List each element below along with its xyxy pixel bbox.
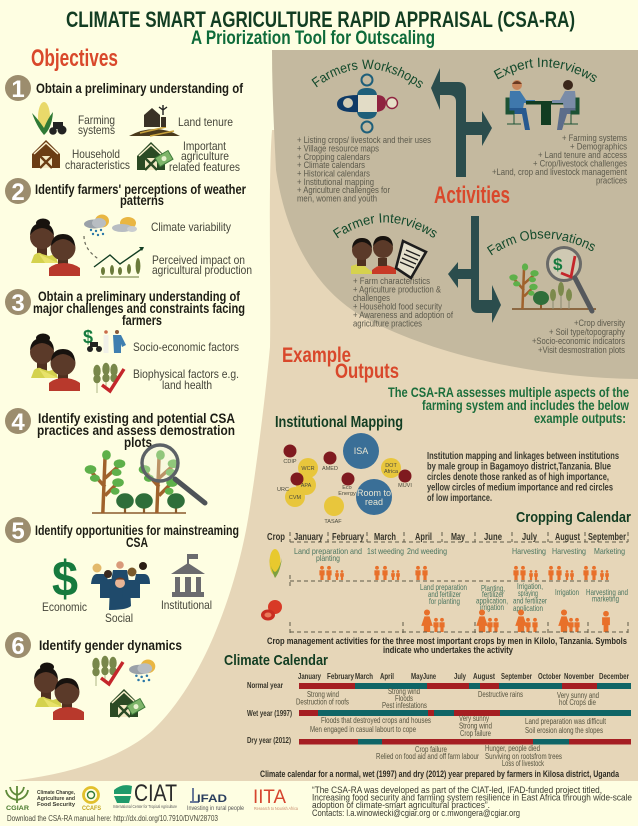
number badge 5 bbox=[5, 517, 31, 545]
label: household characteristics: Household bbox=[72, 147, 120, 161]
activity list bbox=[532, 318, 625, 356]
chart: institutional map bubbles: CDIP bbox=[283, 459, 297, 465]
logo: IFAD bbox=[187, 788, 244, 812]
number badge 6 bbox=[5, 632, 31, 660]
label: important agriculture related features: agriculture bbox=[181, 149, 229, 163]
icon: money, tractor and business people: $ bbox=[83, 327, 93, 347]
activity: expert interviews bbox=[492, 58, 627, 186]
text block: project statement and contacts bbox=[312, 785, 632, 819]
row: dry year: Surviving on rootsfrom trees bbox=[485, 752, 562, 761]
icon: corn and tractor bbox=[32, 102, 66, 135]
number badge 2: 2 bbox=[11, 179, 25, 206]
chart: institutional map bubbles: URC bbox=[277, 487, 289, 493]
label: important agriculture related features: Important bbox=[183, 139, 227, 153]
label: climate variability: Climate variability bbox=[151, 220, 231, 234]
row: maize activity labels: Land preparation and bbox=[294, 546, 362, 556]
label: socio-economic factors: Socio-economic factors bbox=[133, 340, 239, 354]
chart: institutional map bubbles: DOT bbox=[385, 463, 397, 469]
heading: institutional mapping: Institutional Mapping bbox=[275, 414, 403, 431]
logo: CIAT: International Center for Tropical Agriculture bbox=[113, 804, 177, 809]
logo: CIAT: CIAT bbox=[134, 780, 177, 807]
objective 3 heading: farmers bbox=[122, 313, 162, 328]
logo: CGIAR: CGIAR bbox=[6, 805, 29, 812]
activity list: agriculture practices bbox=[353, 318, 422, 330]
month labels: November bbox=[564, 671, 594, 681]
month header: March bbox=[374, 531, 396, 543]
heading: example outputs: Outputs bbox=[335, 360, 399, 383]
activity list bbox=[492, 133, 627, 186]
chart: institutional map bubbles: Africa bbox=[384, 469, 399, 475]
text block: institution mapping description bbox=[427, 451, 619, 504]
label: important agriculture related features bbox=[169, 139, 240, 174]
row: maize who-does-what symbols bbox=[319, 566, 609, 580]
row: wet year: Very sunny bbox=[459, 714, 489, 723]
row: tomato activity labels: marketing bbox=[592, 594, 619, 604]
icon: crops and magnifier with dollar bbox=[509, 248, 596, 311]
row: normal year bbox=[247, 680, 631, 710]
row: tomato who-does-what symbols bbox=[421, 609, 610, 632]
chart: institutional map bubbles: WCR bbox=[301, 466, 315, 472]
label: farming systems bbox=[78, 113, 115, 137]
link: manual download: Download the CSA-RA manual here: http://dx.doi.org/10.7910/DVN/28703 bbox=[7, 813, 218, 823]
row: tomato activity labels: Irrigation, bbox=[517, 581, 543, 591]
activity: farmers workshops bbox=[297, 60, 431, 204]
label: household characteristics: characteristics bbox=[65, 158, 130, 172]
row: normal year: Strong wind bbox=[307, 690, 339, 699]
objective 6 bbox=[5, 632, 182, 720]
row: dry year bbox=[247, 735, 631, 768]
row: normal year: Normal year bbox=[247, 680, 284, 690]
label: biophysical factors bbox=[133, 367, 239, 392]
chart: institutional map bubbles bbox=[277, 433, 412, 525]
label: household characteristics bbox=[65, 147, 130, 172]
chart: cropping calendar bbox=[261, 531, 628, 656]
icon: group of people bbox=[91, 561, 150, 610]
label: perceived impact: agricultural production bbox=[152, 263, 252, 277]
icon: people around table bbox=[337, 74, 398, 132]
icon: two women bbox=[30, 218, 80, 276]
text block: intro to outputs bbox=[388, 385, 629, 426]
activity list: + Household food security bbox=[353, 302, 442, 312]
objective 4 heading: plots bbox=[124, 435, 152, 450]
row: dry year: Relied on food aid and off farm labour bbox=[376, 752, 479, 761]
row: normal year: Strong wind bbox=[388, 687, 420, 696]
row: tomato activity labels: irrigation bbox=[480, 602, 504, 612]
activity list: + Village resource maps bbox=[297, 144, 379, 154]
chart: institutional map bubbles: MUVI bbox=[398, 483, 412, 489]
icon: wheat with check mark bbox=[94, 363, 124, 393]
icon: institution building bbox=[171, 554, 205, 597]
objective 2 heading: Identify farmers' perceptions of weather bbox=[35, 182, 247, 197]
row: tomato activity labels: Irrigation bbox=[555, 587, 579, 597]
row: normal year: Very sunny and bbox=[557, 691, 599, 700]
row: tomato activity labels: and fertilizer bbox=[428, 589, 461, 599]
chart: institutional map bubbles: AMED bbox=[322, 466, 338, 472]
icon: corn bbox=[269, 549, 282, 578]
icon: barn and money bbox=[137, 142, 173, 170]
row: wet year bbox=[247, 708, 631, 738]
logo: IITA: Research to Nourish Africa bbox=[254, 806, 298, 811]
text block: project statement and contacts: adoption of climate-smart agricultural practices”. bbox=[312, 800, 490, 811]
number badge 1 bbox=[5, 75, 31, 103]
objective 5 heading: Identify opportunities for mainstreaming bbox=[35, 523, 239, 538]
row: dry year: Dry year (2012) bbox=[247, 735, 291, 745]
arrow: upper branching bbox=[431, 68, 492, 177]
label: perceived impact: Perceived impact on bbox=[152, 253, 245, 267]
logo: CGIAR bbox=[6, 786, 29, 812]
row: maize activity labels: Marketing bbox=[594, 546, 625, 556]
month header: June bbox=[484, 531, 502, 543]
logo: IITA bbox=[253, 787, 298, 811]
label: economic: Economic bbox=[42, 600, 87, 614]
curved heading: Expert Interviews bbox=[494, 58, 597, 82]
row: normal year: Pest infestations bbox=[382, 701, 427, 710]
activity list: + Farm characteristics bbox=[353, 276, 430, 287]
month labels: April bbox=[380, 671, 394, 681]
background: tan outputs panel bbox=[10, 130, 638, 781]
activity: farmer interviews bbox=[332, 213, 454, 330]
month header bbox=[267, 531, 628, 543]
month header: Crop bbox=[267, 531, 285, 543]
dashed connector arrow bbox=[84, 236, 100, 260]
month header: August bbox=[555, 531, 580, 543]
row: normal year: Destruction of roofs bbox=[296, 698, 349, 706]
row: maize activity labels: Harvesting bbox=[512, 546, 546, 556]
chart: institutional map bubbles: CVM bbox=[289, 495, 302, 501]
objective 1 heading: Obtain a preliminary understanding of bbox=[36, 81, 243, 96]
logo: climate change text: Agriculture and bbox=[37, 796, 75, 802]
number badge 3 bbox=[5, 289, 31, 317]
month header: January bbox=[294, 531, 323, 543]
month labels: January bbox=[298, 671, 321, 681]
row: normal year: hot Crops die bbox=[559, 698, 596, 707]
heading: example outputs: Example bbox=[282, 344, 351, 367]
logo: climate change text: Climate Change, bbox=[37, 790, 75, 796]
month labels: October bbox=[538, 671, 561, 681]
row: wet year: Strong wind bbox=[459, 722, 492, 730]
row: tomato activity labels: spraying bbox=[518, 588, 538, 598]
label: land tenure: Land tenure bbox=[178, 115, 233, 129]
objective 2 heading bbox=[35, 182, 247, 208]
row: wet year: Crop failure bbox=[460, 729, 491, 738]
logo: CCAFS: CCAFS bbox=[82, 806, 101, 812]
logo: climate change text: Food Security bbox=[37, 802, 76, 808]
chart: climate calendar bbox=[247, 671, 631, 780]
activity list: challenges bbox=[353, 293, 390, 304]
month labels: February bbox=[327, 671, 354, 681]
icon: rain cloud bbox=[129, 660, 155, 682]
chart: institutional map bubbles: read bbox=[365, 497, 383, 507]
footer logos bbox=[6, 780, 298, 823]
row: tomato activity labels: for planting bbox=[429, 596, 460, 606]
month header: April bbox=[415, 531, 432, 543]
row: wet year: Men engaged in casual labourt to cope bbox=[310, 725, 416, 734]
activity list: + Institutional mapping bbox=[297, 177, 374, 188]
title: A Priorization Tool for Outscaling bbox=[191, 28, 435, 49]
label: perceived impact bbox=[152, 253, 252, 277]
number badge 4: 4 bbox=[11, 409, 25, 436]
number badge 1: 1 bbox=[11, 76, 25, 103]
icon: two people at a table bbox=[506, 80, 579, 130]
objective 5 heading: CSA bbox=[126, 535, 148, 550]
text block: project statement and contacts: “The CSA-RA was developed as part of the CIAT-led, IFAD-funded project titled, bbox=[312, 785, 602, 796]
activity list: + Listing crops/ livestock and their uses bbox=[297, 135, 431, 146]
heading: example outputs bbox=[282, 344, 399, 383]
heading: activities: Activities bbox=[434, 182, 510, 209]
row: tomato activity labels: application, bbox=[476, 596, 508, 606]
logo: CIAT bbox=[113, 780, 177, 809]
curved heading: Farmers Workshops bbox=[312, 60, 423, 88]
number badge 3: 3 bbox=[11, 290, 25, 317]
row: tomato activity labels: and fertilizer bbox=[513, 596, 547, 606]
activity: farm observations bbox=[486, 230, 625, 356]
logo: climate change text bbox=[37, 790, 76, 808]
icon: weather clouds bbox=[84, 214, 137, 236]
row: dry year: Hunger, people died bbox=[485, 744, 540, 753]
row: maize activity labels: 1st weeding bbox=[367, 546, 404, 556]
icon: rising chart over crops bbox=[94, 247, 144, 277]
objective 4 heading: Identify existing and potential CSA bbox=[38, 411, 235, 426]
activity list: + Climate calendars bbox=[297, 160, 365, 171]
objective 2 heading: patterns bbox=[120, 193, 164, 208]
curved heading: Farm Observations bbox=[486, 230, 595, 256]
label: biophysical factors: Biophysical factors e.g. bbox=[133, 367, 239, 381]
logo: IITA: IITA bbox=[253, 787, 286, 808]
panel: activities bbox=[272, 50, 638, 379]
label: farming systems: Farming bbox=[78, 113, 115, 127]
row: tomato activity labels: Land preparation bbox=[420, 582, 467, 592]
activity list: + Historical calendars bbox=[297, 168, 370, 180]
chart: institutional map bubbles: APA bbox=[301, 483, 312, 489]
logo: IFAD: IFAD bbox=[197, 793, 227, 805]
chart: institutional map bubbles: TASAF bbox=[324, 519, 342, 525]
row: wet year: Land preparation was difficult bbox=[525, 717, 607, 726]
row: tomato activity labels bbox=[420, 581, 628, 613]
heading: objectives: Objectives bbox=[31, 45, 118, 72]
icon: two women bbox=[34, 662, 84, 720]
icon: wheat with check mark bbox=[93, 656, 123, 686]
number badge 5: 5 bbox=[11, 518, 25, 545]
icon: crops and magnifier with dollar: $ bbox=[553, 255, 563, 274]
row: dry year: Loss of livestock bbox=[502, 759, 545, 768]
heading: climate calendar: Climate Calendar bbox=[224, 652, 328, 669]
activity list: + Agriculture challenges for bbox=[297, 185, 390, 196]
icon: trees under a magnifier bbox=[85, 445, 205, 513]
activity list bbox=[297, 135, 431, 204]
text block: project statement and contacts: Contacts: l.a.winowiecki@cgiar.org or c.mwongera@cgiar.org bbox=[312, 808, 520, 819]
month header: July bbox=[522, 531, 537, 543]
number badge 2 bbox=[5, 178, 31, 206]
objective 5 bbox=[5, 517, 239, 625]
row: tomato activity labels: application bbox=[513, 603, 543, 613]
activity list: + Cropping calendars bbox=[297, 152, 370, 163]
icon: barn household bbox=[32, 140, 60, 168]
month labels: March bbox=[355, 671, 373, 681]
icon: tomatoes bbox=[261, 600, 282, 620]
objective 4 bbox=[5, 408, 235, 513]
number badge 6: 6 bbox=[11, 633, 25, 660]
row: wet year: Soil erosion along the slopes bbox=[525, 726, 603, 735]
row: maize activity labels: planting bbox=[316, 553, 340, 563]
activity list: +Crop diversity bbox=[574, 318, 625, 329]
chart: institutional map bubbles: Energy bbox=[338, 491, 356, 497]
row: wet year: Wet year (1997) bbox=[247, 708, 292, 718]
objective 1 bbox=[5, 75, 243, 174]
month labels: September bbox=[501, 671, 532, 681]
month labels: June bbox=[423, 671, 436, 681]
arrow: lower branching bbox=[448, 216, 501, 323]
objective 3 heading: major challenges and constraints facing bbox=[33, 301, 245, 316]
chart: institutional map bubbles: Room to bbox=[357, 488, 391, 498]
row: wet year: Floods that destroyed crops and houses bbox=[321, 716, 431, 725]
icon: green dollar: $ bbox=[52, 551, 78, 607]
month labels: July bbox=[454, 671, 466, 681]
objective 5 heading bbox=[35, 523, 239, 550]
icon: two women bbox=[30, 334, 80, 391]
curved heading: Farmer Interviews bbox=[332, 213, 437, 238]
logo: CCAFS bbox=[82, 788, 101, 812]
row: dry year: Crop failure bbox=[415, 745, 447, 754]
activity list: + Agriculture production & bbox=[353, 284, 442, 296]
chart: institutional map bubbles: ISA bbox=[354, 446, 368, 456]
number badge 4 bbox=[5, 408, 31, 436]
month labels: May bbox=[411, 671, 423, 681]
icon: barn and money bbox=[110, 689, 145, 717]
label: farming systems: systems bbox=[78, 123, 115, 137]
objective 3 heading: Obtain a preliminary understanding of bbox=[38, 289, 240, 304]
objective 6 heading: Identify gender dynamics bbox=[39, 638, 182, 653]
chart: institutional map bubbles: Eco bbox=[342, 485, 352, 491]
label: social: Social bbox=[105, 611, 133, 625]
caption bbox=[267, 636, 627, 656]
logo: IFAD: Investing in rural people bbox=[187, 805, 244, 812]
activity list bbox=[353, 276, 453, 330]
row: maize activity labels: 2nd weeding bbox=[407, 546, 447, 556]
label: biophysical factors: land health bbox=[162, 378, 212, 392]
row: tomato activity labels: Planting, bbox=[481, 583, 505, 593]
row: maize activity labels: Harvesting bbox=[552, 546, 586, 556]
row: tomato activity labels: fertilizer bbox=[482, 589, 504, 599]
icon: money, tractor and business people bbox=[83, 327, 126, 353]
month header: February bbox=[332, 531, 364, 543]
activity list: men, women and youth bbox=[297, 194, 377, 204]
label: institutional: Institutional bbox=[161, 598, 212, 612]
objective 4 heading: practices and assess demostration bbox=[37, 423, 235, 438]
row: normal year: Floods bbox=[395, 694, 413, 703]
title bbox=[66, 7, 575, 49]
activity list: practices bbox=[596, 176, 627, 186]
row: maize activity labels bbox=[294, 546, 625, 563]
objective 3 heading bbox=[33, 289, 245, 328]
icon: women with clipboard bbox=[351, 236, 426, 278]
icon: farmhouse and windmill bbox=[129, 105, 180, 136]
objective 2 bbox=[5, 178, 252, 277]
activity list: + Demographics bbox=[570, 142, 627, 152]
objective 3 bbox=[5, 289, 245, 393]
objective 4 heading bbox=[37, 411, 235, 450]
text block: institution mapping description: of low importance. bbox=[427, 493, 492, 504]
caption: indicate who undertakes the activity bbox=[383, 645, 514, 656]
label: important agriculture related features: related features bbox=[169, 160, 240, 174]
activity list: + Awareness and adoption of bbox=[353, 310, 453, 321]
month header: May bbox=[451, 531, 465, 543]
month labels: August bbox=[473, 671, 495, 681]
month labels bbox=[298, 671, 630, 681]
row: normal year: Destructive rains bbox=[478, 690, 523, 699]
